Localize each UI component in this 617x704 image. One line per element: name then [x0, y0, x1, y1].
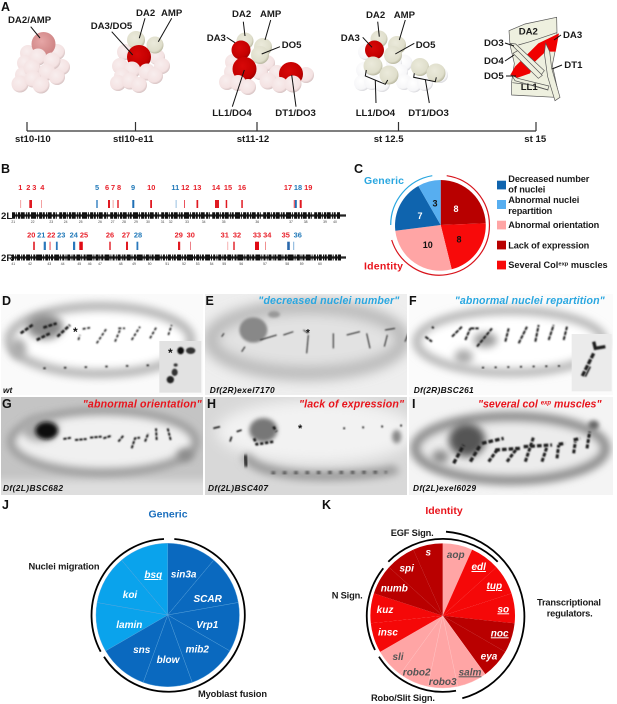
chromosome 2L: 34	[202, 220, 206, 224]
deletion numbers 2R: 30	[187, 230, 195, 240]
deletion numbers 2R: 34	[263, 230, 272, 240]
deletion numbers 2L: 18	[294, 183, 302, 192]
labels st 15: DO5	[484, 71, 504, 82]
chromosome 2L: 40	[333, 220, 337, 224]
chromosome 2R: 53	[196, 262, 200, 266]
labels stl10-e11: DA3/DO5	[91, 21, 133, 32]
deletion numbers 2L: 10	[147, 183, 155, 192]
deletion numbers 2R: 25	[80, 230, 88, 240]
caption H: Df(2L)BSC407	[208, 483, 268, 493]
label H: H	[207, 397, 216, 411]
label Robo/Slit Sign.: Robo/Slit Sign.	[371, 693, 435, 703]
chromosome 2R: 55	[222, 262, 226, 266]
deletion numbers 2R: 26	[106, 230, 114, 240]
chromosome 2L: 38	[304, 220, 308, 224]
pie chart J: sns	[133, 645, 151, 656]
quote lack of expression: "lack of expression"	[299, 399, 405, 411]
chromosome 2L: 21	[11, 220, 15, 224]
labels st 12.5: DA2	[366, 10, 385, 21]
labels st 12.5: DT1/DO3	[408, 108, 449, 119]
chromosome 2R: 50	[148, 262, 152, 266]
heading Identity K: Identity	[425, 505, 463, 517]
legend C	[497, 174, 608, 270]
quote decreased nuclei number: "decreased nuclei number"	[258, 295, 400, 307]
label Transcriptional regulators: Transcriptional	[537, 598, 601, 608]
label Nuclei migration: Nuclei migration	[28, 562, 100, 572]
labels stl10-e11	[91, 8, 183, 55]
chromosome 2R: 41	[11, 262, 15, 266]
labels st 15	[484, 26, 583, 93]
panel H embryo	[205, 397, 417, 495]
chromosome 2L	[1, 211, 346, 224]
labels st 12.5: DO5	[416, 40, 436, 51]
label I: I	[412, 397, 415, 411]
chromosome 2L: 31	[161, 220, 165, 224]
deletion numbers 2R: 20	[27, 230, 35, 240]
deletion numbers 2L: 8	[117, 183, 121, 192]
timeline: st10-l10	[15, 134, 51, 145]
panel label K: K	[322, 498, 331, 512]
pie chart K: s	[426, 548, 432, 558]
heading Generic J: Generic	[148, 508, 188, 520]
deletion numbers 2R: 21	[37, 230, 45, 240]
label Transcriptional regulators: regulators.	[547, 608, 593, 618]
chromosome 2R: 42	[28, 262, 32, 266]
deletion numbers 2L: 12	[181, 183, 189, 192]
pie chart K: edl	[471, 562, 486, 573]
deletion numbers 2L: 19	[304, 183, 312, 192]
panel G embryo	[1, 397, 203, 495]
chromosome 2L: 26	[98, 220, 102, 224]
panel I embryo	[409, 397, 613, 495]
labels st 15: DT1	[564, 60, 583, 71]
labels st11-12	[207, 9, 316, 119]
deletion numbers 2L: 7	[111, 183, 115, 192]
deletion numbers 2L: 6	[105, 183, 109, 192]
chromosome 2L: 24	[64, 220, 68, 224]
panel label C: C	[354, 162, 363, 176]
label Identity C: Identity	[364, 260, 403, 272]
pie chart C: 8	[456, 234, 462, 244]
chromosome 2R: 43	[47, 262, 51, 266]
chromosome 2L: 39	[323, 220, 327, 224]
pie chart K: salm	[459, 667, 482, 678]
legend C: Decreased number	[508, 174, 590, 184]
deletion numbers 2L: 5	[95, 183, 99, 192]
deletion numbers 2R: 29	[175, 230, 183, 240]
pie chart K: insc	[378, 628, 398, 638]
panel label B: B	[1, 162, 10, 176]
legend C: repartition	[508, 206, 553, 216]
pie chart J: sin3a	[171, 570, 197, 581]
timeline	[15, 122, 547, 145]
timeline: stl10-e11	[113, 134, 154, 145]
chromosome 2R: 58	[285, 262, 289, 266]
panel F embryo	[409, 301, 613, 392]
legend C: Lack of expression	[508, 240, 590, 250]
pie chart C: 7	[417, 211, 423, 221]
pie chart J: bsq	[144, 570, 162, 581]
label DA2/AMP	[8, 15, 52, 38]
chromosome 2L: 29	[134, 220, 138, 224]
labels st11-12: DA3	[207, 33, 226, 44]
deletion numbers 2L	[18, 183, 312, 192]
cell cluster stl10-e11	[110, 31, 170, 93]
pie chart K: kuz	[377, 605, 393, 616]
deletion bars 2R	[33, 242, 294, 250]
deletion numbers 2L: 1	[18, 183, 22, 192]
chromosome 2R: 56	[239, 262, 243, 266]
labels st 12.5: DA3	[341, 33, 360, 44]
labels st 12.5	[341, 10, 449, 119]
label Transcriptional regulators	[537, 598, 601, 618]
panel E embryo	[205, 294, 407, 395]
chromosome 2R: 2R	[1, 253, 13, 264]
deletion numbers 2R: 22	[47, 230, 55, 240]
labels st11-12: DA2	[232, 9, 251, 20]
pie chart C: 8	[453, 204, 459, 214]
deletion numbers 2L: 14	[212, 183, 221, 192]
pie chart J: blow	[157, 655, 181, 666]
chromosome 2L: 23	[49, 220, 53, 224]
quote abnormal nuclei repartition: "abnormal nuclei repartition"	[455, 295, 606, 307]
chromosome 2R: 60	[318, 262, 322, 266]
pie chart J: SCAR	[194, 594, 223, 605]
deletion numbers 2R: 36	[294, 230, 302, 240]
labels st11-12: AMP	[260, 9, 282, 20]
cell cluster st 12.5	[354, 30, 448, 92]
caption I: Df(2L)exel6029	[413, 483, 476, 493]
label D: D	[2, 294, 11, 308]
chromosome 2L: 25	[79, 220, 83, 224]
panel label A: A	[1, 0, 10, 14]
labels st 12.5: AMP	[394, 10, 416, 21]
pie chart K: sli	[392, 652, 404, 663]
legend C: muscles	[568, 260, 608, 270]
labels stl10-e11: AMP	[161, 8, 183, 19]
timeline: st 12.5	[374, 134, 404, 145]
label Generic C: Generic	[364, 175, 404, 187]
labels st 15: DO3	[484, 38, 504, 49]
chromosome 2L: 32	[169, 220, 173, 224]
cell cluster st11-12	[219, 32, 314, 95]
chromosome 2L: 35	[222, 220, 226, 224]
chromosome 2R	[1, 253, 346, 266]
pie chart K: spi	[399, 564, 414, 574]
panel D embryo wt	[1, 294, 203, 395]
deletion numbers 2R: 33	[253, 230, 261, 240]
deletion numbers 2L: 2	[26, 183, 30, 192]
deletion numbers 2L: 11	[171, 183, 179, 192]
asterisks D	[73, 325, 173, 360]
labels st11-12: LL1/DO4	[212, 108, 252, 119]
deletion numbers 2L: 13	[193, 183, 201, 192]
quote several col exp muscles: "several col	[478, 399, 538, 411]
chromosome 2L: 36	[255, 220, 259, 224]
chromosome 2L: 22	[31, 220, 35, 224]
chromosome 2R: 59	[300, 262, 304, 266]
asterisks D: *	[73, 325, 78, 339]
chromosome 2R: 44	[61, 262, 65, 266]
muscle diagram st 15	[509, 17, 560, 101]
pie chart C	[391, 176, 489, 275]
timeline: st11-12	[237, 134, 269, 145]
pie chart K: numb	[381, 584, 408, 594]
deletion numbers 2L: 17	[284, 183, 292, 192]
asterisks D: *	[168, 346, 173, 360]
chromosome 2R: 46	[88, 262, 92, 266]
timeline: st 15	[524, 134, 547, 145]
deletion numbers 2R: 31	[221, 230, 229, 240]
pie chart J: lamin	[116, 620, 142, 631]
deletion numbers 2L: 9	[131, 183, 135, 192]
deletion bars 2L	[20, 200, 302, 208]
label Myoblast fusion: Myoblast fusion	[198, 689, 267, 699]
chromosome 2L: 2L	[1, 211, 12, 222]
deletion numbers 2R	[27, 230, 302, 240]
asterisk E: *	[306, 328, 310, 339]
asterisk H: *	[298, 423, 303, 435]
chromosome 2R: 49	[132, 262, 136, 266]
quote abnormal orientation: "abnormal orientation"	[83, 399, 203, 411]
legend C: Abnormal orientation	[508, 220, 600, 230]
pie chart K: eya	[481, 652, 498, 663]
label DA2/AMP: DA2/AMP	[8, 15, 52, 26]
pie chart K: so	[497, 604, 509, 615]
labels st11-12: DO5	[282, 40, 302, 51]
pie chart K: robo3	[429, 677, 457, 688]
deletion numbers 2L: 15	[224, 183, 232, 192]
deletion numbers 2R: 35	[282, 230, 290, 240]
deletion numbers 2R: 24	[70, 230, 79, 240]
chromosome 2L: 27	[111, 220, 115, 224]
chromosome 2R: 48	[119, 262, 123, 266]
labels st 12.5: LL1/DO4	[356, 108, 396, 119]
labels st 15: DA3	[563, 30, 582, 41]
caption E: Df(2R)exel7170	[210, 385, 275, 395]
pie chart K: noc	[491, 628, 509, 639]
caption F: Df(2R)BSC261	[414, 385, 474, 395]
label F: F	[409, 294, 417, 308]
chromosome 2R: 52	[182, 262, 186, 266]
quote several col exp muscles: muscles"	[551, 399, 602, 411]
panel label J: J	[2, 498, 9, 512]
pie chart J	[92, 539, 245, 692]
cell cluster st10-l10	[12, 32, 70, 94]
pie chart K: aop	[447, 550, 465, 561]
pie chart K	[367, 532, 524, 698]
pie chart J: mib2	[186, 644, 209, 655]
pie chart C: 10	[423, 240, 433, 250]
labels st 15: DO4	[484, 56, 504, 67]
deletion numbers 2R: 27	[122, 230, 130, 240]
labels st 15: LL1	[521, 82, 538, 93]
labels st 15: DA2	[519, 26, 538, 38]
chromosome 2L: 37	[289, 220, 293, 224]
chromosome 2R: 57	[263, 262, 267, 266]
chromosome 2R: 51	[165, 262, 169, 266]
quote several col exp muscles: exp	[541, 401, 551, 407]
pie chart J: koi	[123, 590, 137, 601]
labels stl10-e11: DA2	[136, 8, 155, 19]
deletion numbers 2R: 32	[233, 230, 241, 240]
legend C: Abnormal nuclei	[508, 195, 579, 205]
pie chart K: robo2	[403, 667, 431, 678]
pie chart C: 3	[432, 198, 438, 208]
deletion numbers 2R: 28	[134, 230, 142, 240]
labels st11-12: DT1/DO3	[275, 108, 316, 119]
chromosome 2R: 54	[210, 262, 214, 266]
legend C: Several Col	[508, 260, 558, 270]
chromosome 2L: 30	[146, 220, 150, 224]
chromosome 2L: 28	[122, 220, 126, 224]
label EGF Sign.: EGF Sign.	[391, 528, 434, 538]
deletion numbers 2L: 3	[32, 183, 36, 192]
pie chart K: tup	[487, 581, 502, 592]
chromosome 2R: 47	[98, 262, 102, 266]
chromosome 2L: 33	[185, 220, 189, 224]
deletion numbers 2L: 4	[40, 183, 45, 192]
legend C: of nuclei	[508, 184, 545, 194]
deletion numbers 2R: 23	[57, 230, 65, 240]
pie chart J: Vrp1	[196, 620, 219, 631]
caption wt: wt	[3, 385, 14, 395]
label E: E	[206, 294, 214, 308]
label N Sign.: N Sign.	[332, 590, 363, 600]
label G: G	[2, 397, 12, 411]
deletion numbers 2L: 16	[238, 183, 246, 192]
caption G: Df(2L)BSC682	[3, 483, 63, 493]
legend C: exp	[558, 262, 569, 268]
chromosome 2R: 45	[77, 262, 81, 266]
